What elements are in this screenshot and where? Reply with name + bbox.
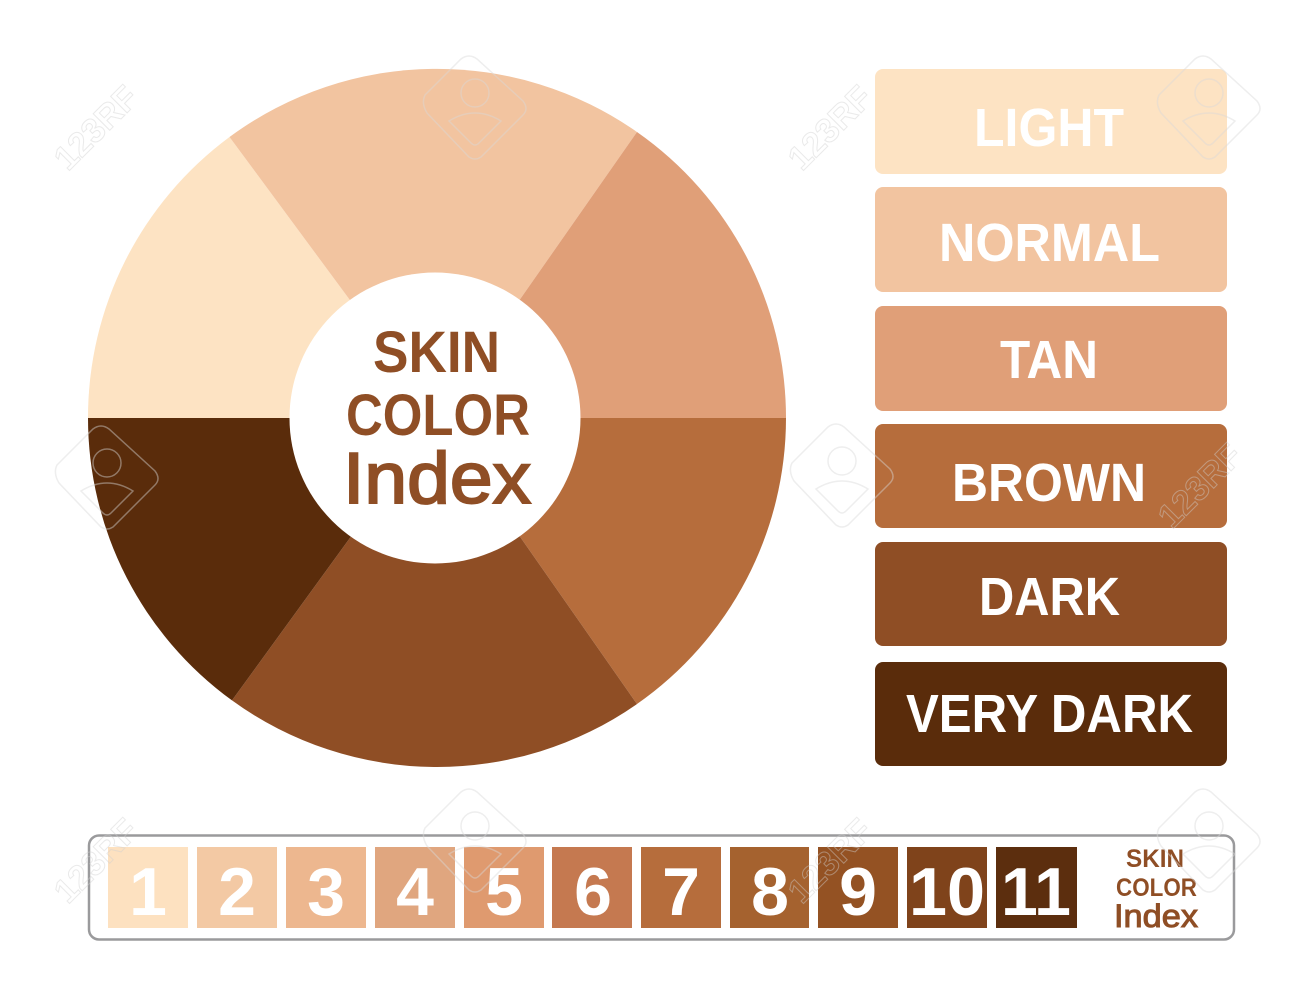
swatch 1 [108, 847, 188, 930]
swatch 11: 11 [1001, 854, 1071, 930]
legend item: brown: BROWN [952, 453, 1146, 513]
swatch 8 [730, 847, 809, 930]
center title [343, 320, 531, 519]
small title: SKIN [1126, 845, 1184, 873]
swatch 9 [818, 847, 898, 930]
segment: tan [437, 132, 786, 418]
legend item: tan: TAN [1000, 330, 1098, 390]
swatch 7 [641, 847, 721, 930]
swatch 7: 7 [662, 854, 700, 930]
watermark stamps [55, 56, 1260, 892]
swatch 3: 3 [307, 854, 345, 930]
watermark text [47, 79, 1250, 911]
legend item: very dark [875, 662, 1227, 766]
watermarks [47, 56, 1260, 911]
legend item: light: LIGHT [974, 98, 1124, 158]
legend item: very dark: VERY DARK [906, 684, 1193, 744]
watermark text: 123RF [1151, 437, 1250, 536]
legend [875, 69, 1227, 766]
swatch 3 [286, 847, 366, 930]
swatch 4: 4 [396, 854, 434, 930]
swatch 2: 2 [218, 854, 256, 930]
small title: Index [1114, 898, 1198, 934]
center title: Index [343, 439, 531, 519]
swatch 2 [197, 847, 277, 930]
legend item: tan [875, 306, 1227, 411]
swatch 6: 6 [574, 854, 612, 930]
swatch 6 [552, 847, 632, 930]
watermark text: 123RF [781, 812, 880, 911]
swatch 5: 5 [485, 854, 523, 930]
watermark text: 123RF [47, 79, 146, 178]
numbered scale [89, 836, 1234, 940]
scale frame [89, 836, 1234, 940]
segment: very dark [88, 418, 437, 700]
swatch 5 [464, 847, 544, 930]
center title: COLOR [346, 383, 530, 448]
watermark text: 123RF [781, 79, 880, 178]
segment: brown [437, 418, 786, 704]
legend item: light [875, 69, 1227, 174]
swatch 9: 9 [839, 854, 877, 930]
legend item: dark [875, 542, 1227, 646]
legend item: dark: DARK [979, 567, 1120, 627]
segment: light [88, 137, 437, 418]
swatch 4 [375, 847, 455, 930]
swatch 8: 8 [751, 854, 789, 930]
center title: SKIN [373, 320, 500, 385]
watermark text: 123RF [47, 812, 146, 911]
legend item: normal [875, 187, 1227, 292]
segment: dark [232, 418, 637, 767]
segment: normal [230, 69, 637, 418]
swatch 10: 10 [909, 854, 985, 930]
small title [1114, 845, 1198, 934]
legend item: normal: NORMAL [939, 213, 1160, 273]
wheel chart [88, 69, 786, 767]
legend item: brown [875, 424, 1227, 528]
center circle [290, 272, 580, 564]
swatch 1: 1 [129, 854, 167, 930]
small title: COLOR [1116, 874, 1197, 902]
